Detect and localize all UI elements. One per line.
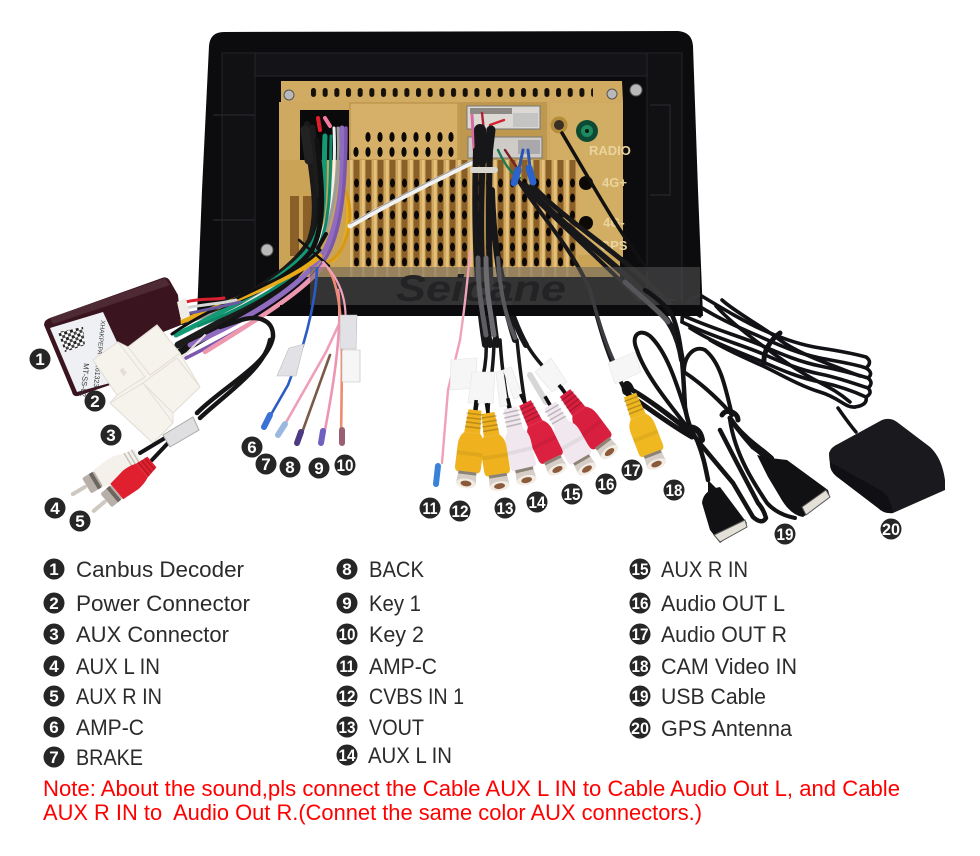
- white harness connectors: M1: [118, 368, 127, 377]
- legend item 10: 10: [338, 625, 356, 644]
- legend item 13: 13: [338, 718, 356, 737]
- callout 19: 19: [776, 525, 794, 544]
- callout 5: 5: [75, 512, 85, 531]
- watermark band: [280, 267, 702, 316]
- wire: cable tie: [473, 167, 495, 173]
- port labels: GPS: [600, 238, 628, 253]
- callout 18: 18: [666, 481, 682, 500]
- wire tip leads: [265, 262, 346, 441]
- AUX cable label: [163, 417, 199, 447]
- legend item 13: VOUT: [369, 715, 424, 740]
- callout 3: [100, 424, 122, 446]
- canbus decoder box: XHAKPEPA: [95, 320, 106, 356]
- callout 3: 3: [106, 426, 116, 445]
- wires: RCA black bundle: [475, 130, 526, 345]
- pink AMP-C lead: [442, 340, 460, 463]
- legend item 17: 17: [632, 625, 648, 644]
- red note: [43, 776, 900, 825]
- callout 4: [44, 498, 66, 518]
- legend item 9: 9: [342, 594, 352, 613]
- legend item 9: Key 1: [369, 591, 421, 616]
- callout 5: [70, 510, 90, 532]
- legend item 4: [44, 654, 160, 679]
- white harness connectors: [93, 325, 200, 443]
- callout 11: 11: [422, 499, 438, 518]
- canbus decoder box: 20161323: [92, 356, 102, 388]
- legend item 10: Key 2: [369, 622, 424, 647]
- legend item 18: 18: [632, 657, 648, 676]
- legend item 11: [336, 654, 437, 679]
- radio antenna sockets: [550, 116, 598, 142]
- USB cables: [624, 290, 795, 521]
- wire labels: [277, 315, 360, 382]
- blue connector sleeves: [514, 168, 533, 183]
- legend item 5: 5: [49, 687, 59, 706]
- legend item 5: [44, 684, 162, 709]
- legend item 6: 6: [49, 718, 59, 737]
- legend item 4: AUX L IN: [76, 654, 160, 679]
- RCA female: VOUT yellow: [474, 401, 513, 493]
- watermark band: Seicane: [396, 268, 566, 309]
- screws: [261, 84, 642, 256]
- legend item 7: [44, 745, 143, 770]
- canbus decoder box: MT-SS-02: [78, 363, 91, 397]
- legend item 14: AUX L IN: [368, 743, 452, 768]
- legend item 7: 7: [49, 748, 59, 767]
- lead: BACK brown: [299, 355, 330, 441]
- legend item 7: BRAKE: [76, 745, 143, 770]
- legend item 11: AMP-C: [369, 654, 437, 679]
- callout 12: 12: [452, 502, 468, 521]
- legend item 1: 1: [49, 560, 59, 579]
- black chassis: [197, 31, 703, 316]
- blue tip: [436, 466, 438, 484]
- callout 15: 15: [564, 485, 580, 504]
- gold metal housing: [279, 81, 623, 277]
- legend item 3: 3: [49, 625, 59, 644]
- legend item 6: AMP-C: [76, 715, 144, 740]
- legend: [44, 557, 797, 770]
- GPS antenna puck: [829, 419, 945, 513]
- callout 9: 9: [314, 459, 324, 478]
- legend item 14: [336, 743, 452, 768]
- callout 14: 14: [528, 493, 546, 512]
- callout 6: [242, 436, 262, 458]
- legend item 15: [630, 557, 748, 582]
- callout 4: 4: [50, 499, 60, 518]
- legend item 5: AUX R IN: [76, 684, 162, 709]
- white multi-pin sockets: [467, 106, 542, 158]
- main harness socket: [300, 110, 349, 160]
- legend item 13: [336, 715, 424, 740]
- legend item 2: 2: [49, 594, 59, 613]
- legend item 19: 19: [632, 687, 648, 706]
- port labels: 4G-: [603, 215, 625, 230]
- legend item 6: [44, 715, 144, 740]
- legend item 12: [336, 684, 464, 709]
- callout 8: 8: [285, 458, 295, 477]
- photo callout numbers: [30, 348, 902, 544]
- legend item 16: 16: [632, 594, 648, 613]
- callout 2: 2: [90, 392, 100, 411]
- legend item 10: [336, 622, 424, 647]
- RCA female: Audio OUT R red: [549, 377, 623, 464]
- callout 9: [308, 458, 330, 478]
- lead: Key 1 pink: [323, 290, 339, 440]
- callout 1: [30, 348, 50, 370]
- red note: Note: About the sound,pls connect the Cable AUX L IN to Cable Audio Out L, and Cable: [43, 776, 900, 801]
- legend item 8: 8: [342, 560, 352, 579]
- callout 20: 20: [882, 520, 900, 539]
- legend item 20: GPS Antenna: [661, 716, 793, 741]
- legend item 19: USB Cable: [661, 684, 766, 709]
- QR code: [58, 327, 85, 352]
- RCA female: camera yellow: [614, 381, 670, 473]
- callout 7: [256, 454, 276, 474]
- lead: AMP-C blue: [265, 268, 317, 425]
- callout 13: 13: [496, 499, 514, 518]
- wires: main harness: [165, 118, 350, 358]
- black AUX cable: [140, 318, 273, 460]
- decoder plug: [177, 298, 190, 320]
- legend item 15: 15: [632, 560, 648, 579]
- callout 1: 1: [35, 350, 45, 369]
- RCA female: AUX white: [495, 395, 540, 488]
- wire: GPS antenna lead: [562, 133, 700, 316]
- USB plug B: [757, 455, 830, 517]
- RCA plug: AUX L IN white: [65, 445, 144, 505]
- wire tips: [264, 415, 342, 443]
- legend item 3: AUX Connector: [76, 622, 229, 647]
- legend item 9: [336, 591, 421, 616]
- port labels: 4G+: [602, 175, 627, 190]
- legend item 16: Audio OUT L: [661, 591, 785, 616]
- legend item 20: 20: [631, 719, 649, 738]
- callout 7: 7: [261, 455, 271, 474]
- wires: upper sockets: [472, 113, 531, 178]
- RCA tag labels: [450, 352, 641, 407]
- legend item 15: AUX R IN: [661, 557, 748, 582]
- legend item 2: Power Connector: [76, 591, 250, 616]
- decoder label: [50, 312, 117, 392]
- legend item 18: CAM Video IN: [661, 654, 797, 679]
- lead: pink loops: [323, 262, 346, 330]
- legend item 14: 14: [338, 746, 356, 765]
- legend item 8: BACK: [369, 557, 424, 582]
- legend item 1: Canbus Decoder: [76, 557, 244, 582]
- canbus decoder box: [44, 277, 181, 397]
- callout 6: 6: [247, 438, 257, 457]
- callout 17: 17: [624, 461, 640, 480]
- legend item 8: [336, 557, 424, 582]
- callout 10: 10: [336, 456, 354, 475]
- wires over band: [460, 252, 668, 370]
- wire: white flat lead: [350, 158, 477, 226]
- legend item 17: Audio OUT R: [661, 622, 787, 647]
- wires: RCA lower leads: [476, 340, 565, 413]
- RCA female: AUX red: [509, 388, 571, 480]
- port labels: [589, 143, 631, 253]
- wires: rear signal cables: [518, 180, 682, 395]
- legend item 11: 11: [340, 657, 354, 676]
- wires: coiled GPS cable: [682, 295, 871, 432]
- callout 16: 16: [598, 475, 614, 494]
- callout 8: [280, 456, 300, 478]
- legend item 12: CVBS IN 1: [369, 684, 464, 709]
- lead: Key 2 red: [328, 268, 342, 441]
- USB plug A: [702, 480, 747, 543]
- RCA female: Audio OUT L white: [534, 390, 601, 480]
- callout 2: [84, 390, 106, 412]
- RCA plug: AUX R IN red: [85, 453, 160, 521]
- silver sleeve: [530, 375, 546, 402]
- red note: AUX R IN to Audio Out R.(Connet the same color AUX connectors.): [43, 800, 702, 825]
- head unit rear panel: [197, 31, 703, 316]
- lead: BRAKE pink: [280, 322, 340, 433]
- legend item 12: 12: [338, 687, 356, 706]
- legend item 4: 4: [49, 657, 59, 676]
- RCA female: CVBS yellow: [452, 398, 489, 490]
- port labels: RADIO: [589, 143, 631, 158]
